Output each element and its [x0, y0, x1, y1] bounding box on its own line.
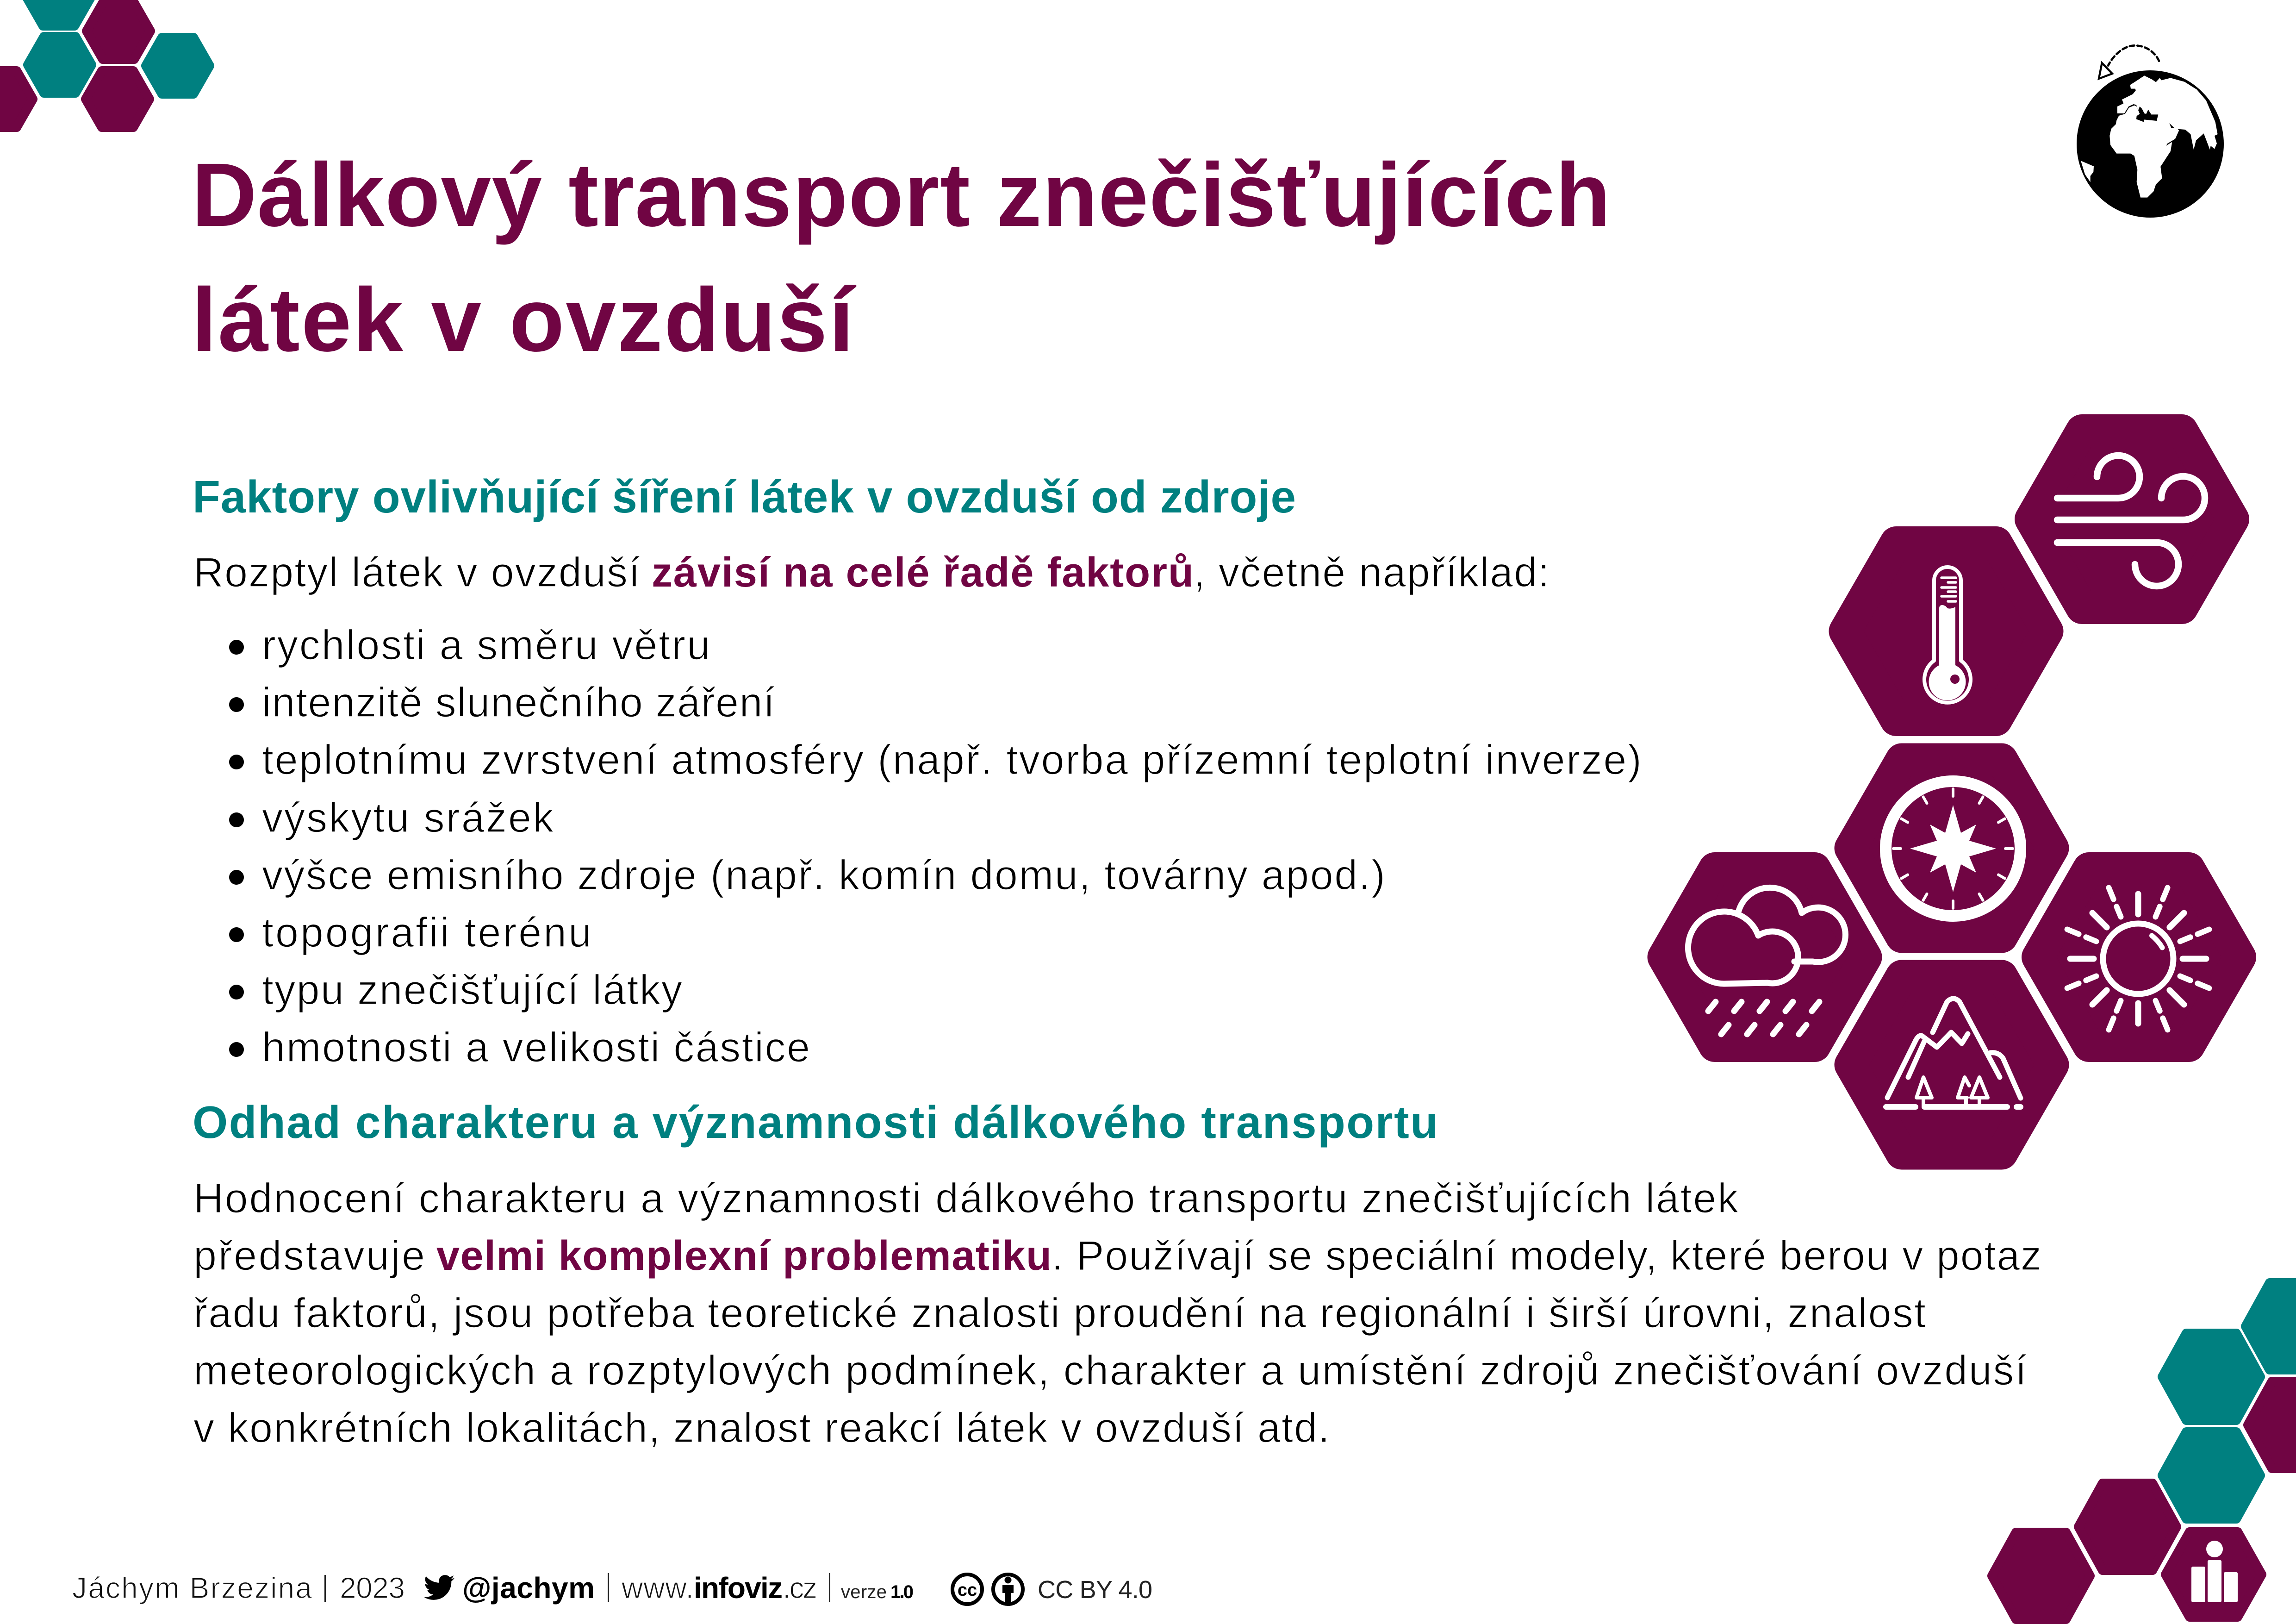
text block: assessment paragraph: v konkrétních lokalitách, znalost reakcí látek v ovzduší atd.	[193, 1405, 1330, 1451]
list of factors: teplotnímu zvrstvení atmosféry (např. tvorba přízemní teplotní inverze)	[262, 737, 1642, 783]
icon hexagon: mountains	[1850, 976, 2053, 1154]
footer: author and year: Jáchym Brzezina	[72, 1571, 312, 1605]
text block: factors intro: závisí na celé řadě faktorů	[652, 550, 1194, 596]
icon hexagon: compass	[1850, 759, 2053, 937]
icon: creative commons by	[952, 1574, 1023, 1604]
icon: creative commons by: cc	[958, 1580, 977, 1600]
heading: factors: Faktory ovlivňující šíření látek v ovzduší od zdroje	[193, 471, 1296, 522]
title: Dálkový transport znečišťujících	[192, 144, 1611, 245]
footer: author and year: 2023	[340, 1571, 405, 1605]
icon: twitter bird	[424, 1575, 454, 1600]
decoration: hexagons top left	[0, 0, 210, 127]
text block: factors intro: Rozptyl látek v ovzduší	[193, 550, 640, 596]
heading: assessment: Odhad charakteru a významnosti dálkového transportu	[193, 1097, 1438, 1148]
list of factors: rychlosti a směru větru	[262, 622, 710, 668]
list of factors: typu znečišťující látky	[262, 967, 682, 1013]
footer: handle and website: @jachym	[462, 1571, 595, 1605]
text block: factors intro: , včetně například:	[1194, 550, 1549, 596]
footer: handle and website	[462, 1571, 914, 1605]
list of factors: topografii terénu	[262, 910, 591, 956]
text block: assessment paragraph: představuje	[193, 1233, 425, 1279]
footer: handle and website: infoviz	[694, 1571, 783, 1605]
list of factors: intenzitě slunečního záření	[262, 680, 775, 726]
list of factors: hmotnosti a velikosti částice	[262, 1024, 810, 1071]
icon hexagon: rain clouds	[1663, 868, 1866, 1046]
text block: assessment paragraph: velmi komplexní problematiku	[436, 1233, 1052, 1279]
decoration: hexagons bottom right	[1992, 1283, 2296, 1619]
text block: factors intro	[193, 550, 1549, 596]
footer: handle and website: 1.0	[890, 1582, 914, 1602]
footer: licence: CC BY 4.0	[1038, 1576, 1152, 1604]
list of factors	[229, 622, 1642, 1071]
text block: assessment paragraph: řadu faktorů, jsou potřeba teoretické znalosti proudění na regionální i širší úrovni, znalost	[193, 1290, 1926, 1337]
icon hexagon: sun	[2038, 868, 2240, 1046]
icon hexagon: wind	[2031, 431, 2233, 608]
footer: handle and website: verze	[841, 1582, 887, 1602]
footer: handle and website: www.	[621, 1571, 694, 1605]
icon hexagon: thermometer	[1845, 543, 2047, 720]
title: látek v ovzduší	[192, 269, 857, 370]
icon hexagon: infoviz logo	[2165, 1532, 2262, 1617]
footer: handle and website: .cz	[783, 1571, 817, 1605]
text block: assessment paragraph	[193, 1175, 2041, 1451]
text block: assessment paragraph: . Používají se speciální modely, které berou v potaz	[1052, 1233, 2041, 1279]
text block: assessment paragraph: Hodnocení charakteru a významnosti dálkového transportu znečišťujících látek	[193, 1175, 1739, 1222]
icon: globe with dashed arrow	[2077, 45, 2224, 218]
list of factors: výskytu srážek	[262, 795, 554, 841]
list of factors: výšce emisního zdroje (např. komín domu, továrny apod.)	[262, 852, 1385, 899]
text block: assessment paragraph: meteorologických a rozptylových podmínek, charakter a umístění zdrojů znečišťování ovzduší	[193, 1348, 2027, 1394]
title	[192, 144, 1611, 370]
